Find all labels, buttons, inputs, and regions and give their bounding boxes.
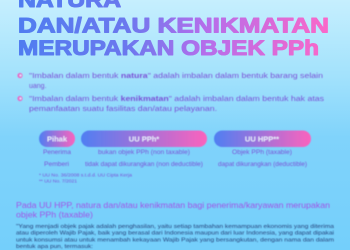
row: Penerima: Penerima [43,150,72,156]
text: kenikmatan definition: pemanfaatan suatu fasilitas dan/atau pelayanan. [29,106,217,113]
footnotes: ** UU No. 7/2021 [39,178,78,184]
row: Penerima [43,150,292,156]
icon: bullet 1 [17,73,23,78]
legal quote [16,224,335,250]
definitions list [17,73,325,113]
pill: Pihak: Pihak [47,134,68,144]
text: kenikmatan definition: "Imbalan dalam bentuk kenikmatan " adalah imbalan dalam bentuk hak atas [29,96,293,103]
pill: UU PPh: UU PPh* [129,134,159,144]
legal quote: bentuk apa pun, termasuk: [16,244,93,250]
bullet: natura definition [17,73,323,90]
title: DAN/ATAU KENIKMATAN [18,14,329,38]
legal quote: untuk konsumsi atau untuk menambah kekayaan Wajib Pajak yang bersangkutan, dengan nama dan dalam [16,237,334,243]
legal quote: "Yang menjadi objek pajak adalah penghasilan, yaitu setiap tambahan kemampuan ekonomis yang diterima [16,224,335,230]
row: Penerima: bukan objek PPh (non taxable) [98,150,190,156]
footnotes: * UU No. 36/2008 s.t.d.d. UU Cipta Kerja [39,172,133,178]
pill: UU HPP [214,130,311,147]
row: Pemberi [44,162,307,168]
row: Penerima: Objek PPh (taxable) [232,150,292,156]
subheading: objek PPh (taxable) [16,210,93,220]
subheading: Pada UU HPP, natura dan/atau kenikmatan bagi penerima/karyawan merupakan [16,200,330,210]
row: Pemberi: dapat dikurangkan (deductible) [218,162,307,168]
icon: bullet 2 [17,96,23,101]
legal quote: atau diperoleh Wajib Pajak, baik yang berasal dari Indonesia maupun dari luar Indonesia, yang dapat dipakai [16,231,334,237]
text: natura definition: "Imbalan dalam bentuk natura " adalah imbalan dalam bentuk barang selain [29,73,288,80]
pill: UU PPh [81,130,207,147]
pill: Pihak [39,130,75,147]
row: Pemberi: Pemberi [44,162,69,168]
comparison table [39,130,311,184]
title [18,0,329,60]
footnotes [39,172,133,184]
pill: UU HPP: UU HPP** [245,134,279,144]
bullet: kenikmatan definition [17,96,325,113]
closing section [16,200,335,250]
text: natura definition: uang. [29,83,47,90]
title: MERUPAKAN OBJEK PPh [18,36,319,60]
row: Pemberi: tidak dapat dikurangkan (non deductible) [85,162,203,168]
